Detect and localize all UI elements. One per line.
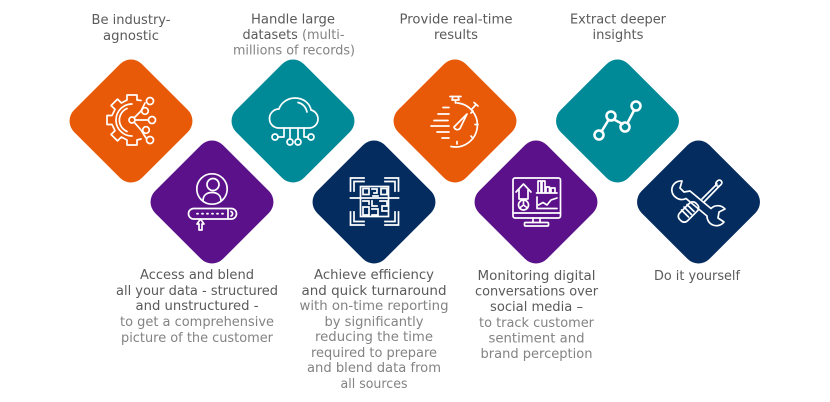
panel: be industry-agnostic — [63, 13, 199, 189]
text: achieve efficiency: Achieve efficiency — [314, 268, 434, 283]
heading: be industry-agnostic — [92, 13, 171, 44]
navy diamond — [306, 134, 442, 270]
panel: real-time results — [387, 12, 523, 189]
text: access and blend: and unstructured - — [136, 299, 259, 314]
teal diamond — [550, 53, 685, 189]
icon: line trend — [594, 102, 640, 140]
text: monitoring conversations — [475, 269, 599, 362]
purple diamond — [144, 134, 280, 270]
text: access and blend: Access and blend — [140, 268, 254, 283]
icon: stopwatch — [431, 96, 478, 147]
panel: extract deeper insights — [550, 12, 685, 189]
orange diamond — [387, 53, 523, 189]
heading: be industry-agnostic: Be industry- — [92, 13, 171, 28]
text: achieve efficiency: and blend data from — [307, 361, 441, 376]
text: do it yourself: Do it yourself — [654, 269, 740, 284]
panel: achieve efficiency — [300, 134, 448, 392]
text: monitoring conversations: social media – — [490, 300, 583, 315]
panel: handle large datasets — [225, 12, 361, 189]
text: access and blend — [116, 268, 278, 346]
heading: handle large datasets: datasets (multi- — [242, 28, 345, 43]
text: achieve efficiency: all sources — [340, 377, 408, 392]
text: access and blend: to get a comprehensive — [120, 315, 274, 330]
text: access and blend: all your data - structured — [116, 284, 278, 299]
navy diamond — [631, 134, 766, 270]
icon: wrench and screwdriver — [672, 179, 725, 226]
icon: QR code scanner — [350, 178, 398, 225]
orange diamond — [63, 53, 199, 189]
heading: real-time results: results — [434, 28, 478, 43]
heading: real-time results — [400, 12, 512, 43]
heading: handle large datasets — [233, 12, 355, 58]
heading: handle large datasets: Handle large — [251, 12, 335, 28]
text: achieve efficiency: and quick turnaround — [302, 284, 446, 299]
icon: cloud network — [270, 98, 318, 145]
text: achieve efficiency: with on-time reporting — [300, 299, 448, 314]
text: monitoring conversations: Monitoring digital — [478, 269, 596, 284]
heading: handle large datasets: millions of records) — [233, 44, 355, 58]
purple diamond — [468, 134, 604, 270]
text: monitoring conversations: to track customer — [479, 316, 595, 331]
text: monitoring conversations: brand perception — [480, 347, 592, 362]
icon: dashboard monitor — [513, 178, 560, 226]
panel: access and blend — [116, 134, 280, 346]
heading: extract deeper insights: insights — [592, 28, 644, 43]
heading: be industry-agnostic: agnostic — [103, 29, 159, 44]
teal diamond — [225, 53, 361, 189]
text: access and blend: picture of the customer — [121, 331, 274, 346]
text: monitoring conversations: sentiment and — [488, 332, 584, 346]
heading: extract deeper insights: Extract deeper — [570, 12, 667, 28]
heading: real-time results: Provide real-time — [400, 12, 512, 28]
text: achieve efficiency: by significantly — [324, 315, 424, 330]
icon: user login — [188, 174, 236, 230]
text: monitoring conversations: conversations over — [475, 284, 599, 300]
panel: do it yourself — [631, 134, 766, 284]
text: achieve efficiency: reducing the time — [315, 330, 433, 345]
text: achieve efficiency — [300, 268, 448, 392]
panel: monitoring conversations — [468, 134, 604, 362]
heading: extract deeper insights — [570, 12, 667, 43]
icon: gear with nodes — [107, 95, 156, 145]
text: achieve efficiency: required to prepare — [311, 346, 437, 361]
